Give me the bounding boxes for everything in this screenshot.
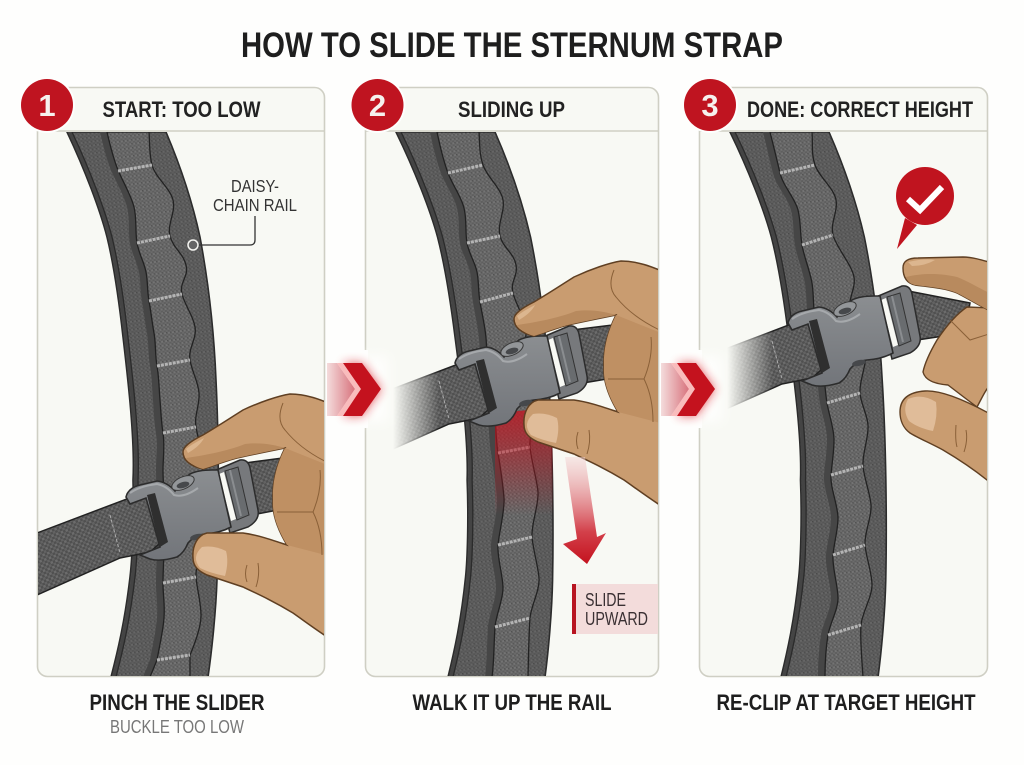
caption: buckle too low: BUCKLE TOO LOW <box>110 716 244 737</box>
badge: step 2: 2 <box>369 88 386 123</box>
badge: step 3: 3 <box>701 88 719 123</box>
icon: hand releasing strap <box>900 257 992 484</box>
illustration: rail, buckle and hand with red highlight <box>394 132 658 676</box>
arrow: red slide direction <box>563 457 606 564</box>
callout: daisy-chain rail <box>188 176 297 250</box>
illustration: rail, clipped buckle and hand <box>728 132 987 676</box>
callout: slide upward: SLIDE <box>585 590 626 610</box>
callout: daisy-chain rail: CHAIN RAIL <box>213 195 297 215</box>
panel: step 1 start too low <box>37 88 345 677</box>
arrow: chevron step 2 to 3 <box>661 350 722 428</box>
panel: step 3 done correct height <box>699 88 992 677</box>
callout: daisy-chain rail: DAISY- <box>231 176 279 196</box>
badge: step 2 <box>350 77 406 133</box>
callout: slide upward <box>572 584 658 634</box>
heading: start too low: START: TOO LOW <box>102 97 261 122</box>
heading: done correct height: DONE: CORRECT HEIGHT <box>747 97 973 122</box>
title: HOW TO SLIDE THE STERNUM STRAP <box>241 26 783 65</box>
caption: walk it up the rail: WALK IT UP THE RAIL <box>412 690 612 715</box>
icon: red check speech bubble <box>896 167 954 249</box>
caption: pinch the slider: PINCH THE SLIDER <box>90 690 265 715</box>
callout: slide upward: UPWARD <box>585 609 648 629</box>
badge: step 3 <box>682 77 738 133</box>
heading: sliding up: SLIDING UP <box>458 97 565 122</box>
illustration: rail and pinching hand <box>37 132 345 677</box>
badge: step 1 <box>19 77 75 133</box>
badge: step 1: 1 <box>38 88 56 123</box>
arrow: chevron step 1 to 2 <box>327 350 388 428</box>
panel: step 2 sliding up <box>366 88 676 677</box>
caption: re-clip at target height: RE-CLIP AT TARGET HEIGHT <box>716 690 976 715</box>
